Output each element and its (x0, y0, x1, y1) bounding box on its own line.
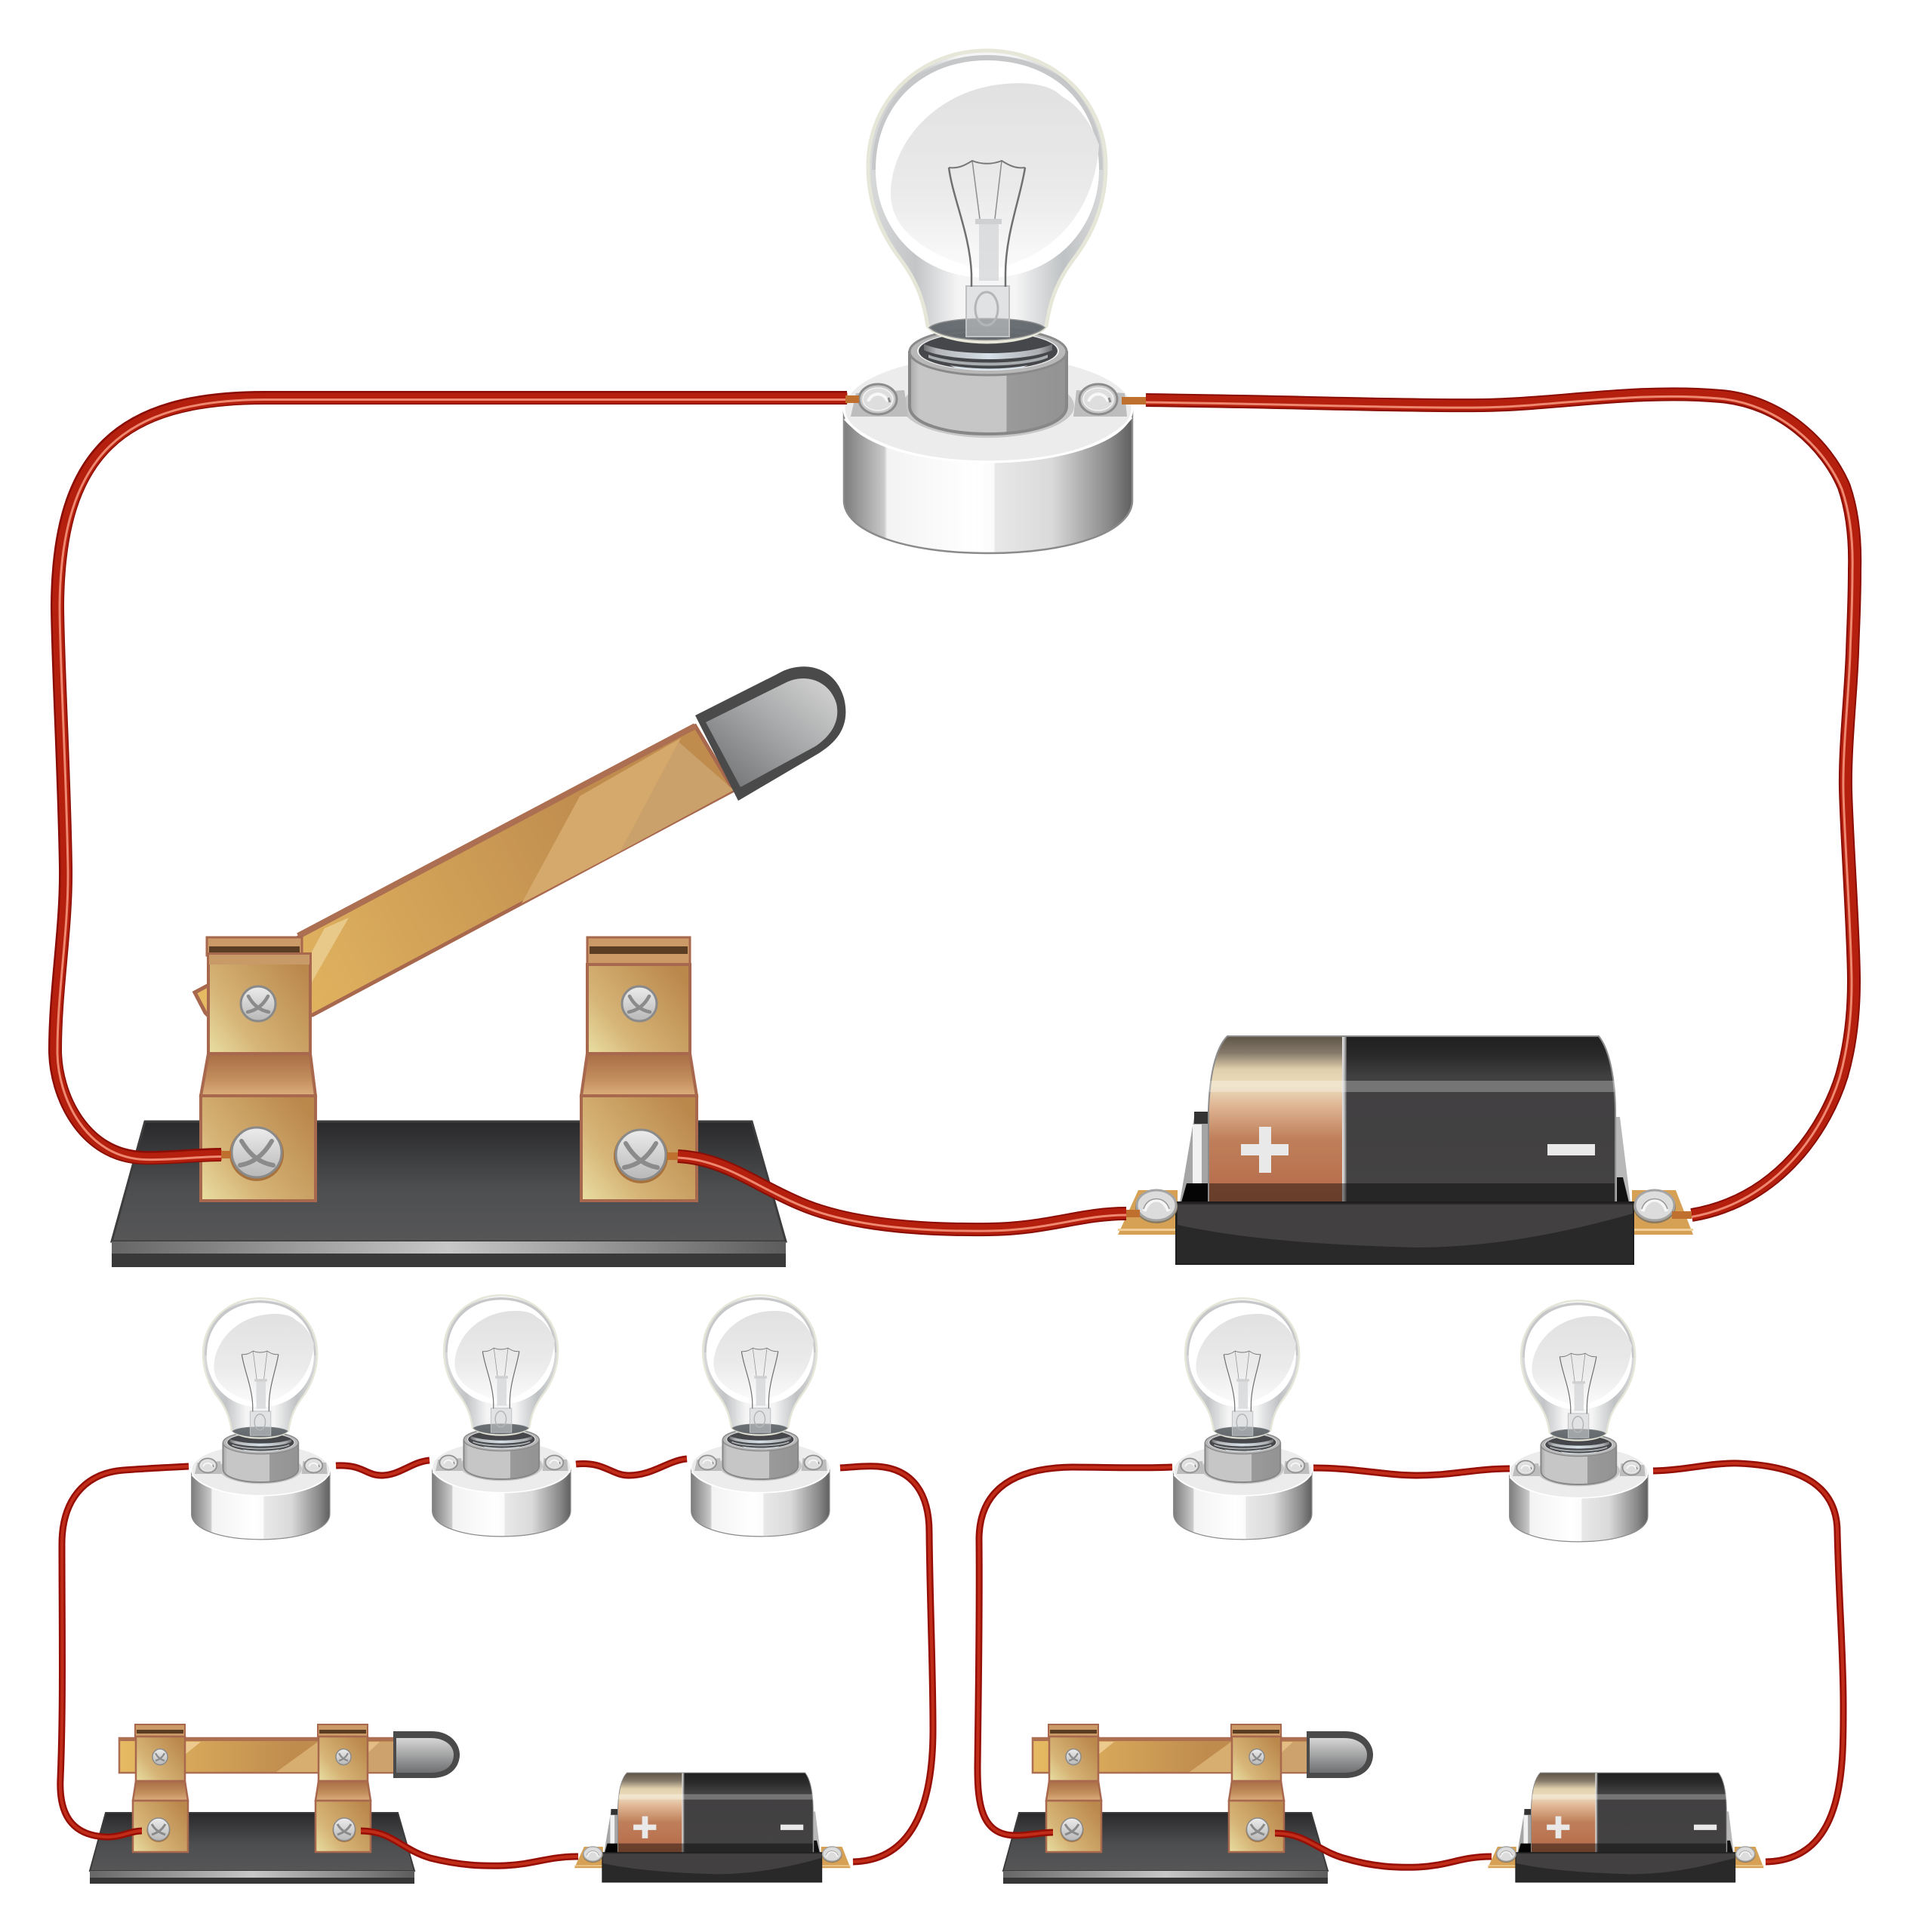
series circuit: wires (60, 1459, 933, 1866)
minus sign (1547, 1144, 1595, 1155)
left switch post (201, 937, 316, 1201)
series circuit: battery (574, 1773, 851, 1882)
parallel circuit: second bulb (1510, 1300, 1648, 1542)
parallel circuit: wires (978, 1463, 1843, 1867)
main circuit: knife switch (open) (112, 666, 845, 1267)
battery holder base (1176, 1202, 1633, 1264)
terminal plates and screws (851, 384, 1127, 417)
main wire: switch to battery (667, 1156, 1140, 1231)
main wire: bulb to battery (1122, 394, 1855, 1217)
battery terminals (1118, 1190, 1693, 1235)
series circuit: first bulb (192, 1298, 330, 1540)
series circuit: third bulb (691, 1295, 830, 1537)
positive end of battery cell (1209, 1036, 1342, 1202)
right switch post (581, 937, 697, 1201)
parallel circuit: battery (1488, 1773, 1764, 1882)
battery details (1209, 1036, 1615, 1202)
battery holder clips (1180, 1112, 1630, 1202)
series circuit: second bulb (433, 1295, 571, 1537)
main wire: bulb to switch (55, 398, 859, 1160)
lamp holder base (844, 355, 1132, 553)
parallel circuit: closed switch (1003, 1724, 1373, 1884)
main circuit: battery in holder (1118, 1036, 1693, 1264)
parallel circuit: first bulb (1174, 1298, 1312, 1540)
series circuit: closed switch (90, 1724, 460, 1884)
plus sign (1241, 1127, 1289, 1173)
terminal screws (1135, 1190, 1676, 1223)
switch base plate (112, 1121, 786, 1267)
socket collar (910, 328, 1067, 434)
switch handle knob (695, 666, 845, 801)
switch blade (195, 726, 734, 1015)
filament and stem (949, 161, 1025, 337)
negative body of battery cell (1347, 1036, 1615, 1202)
glass bulb envelope (868, 51, 1106, 342)
main circuit: lamp holder with light bulb (844, 51, 1132, 553)
